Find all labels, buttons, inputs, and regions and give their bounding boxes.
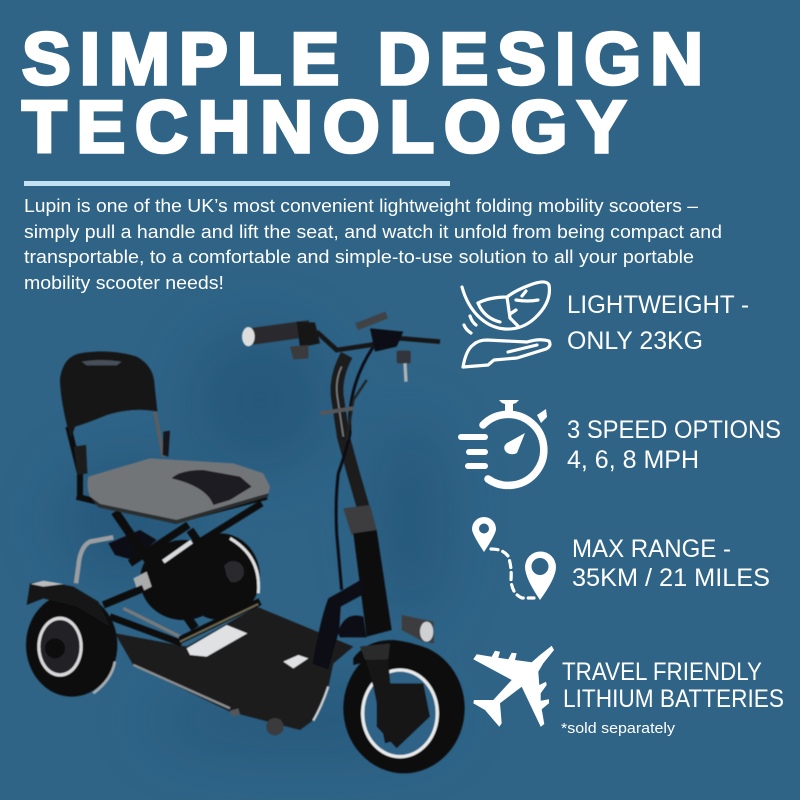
rear chrome bar xyxy=(76,537,113,583)
feature text: ONLY 23KG xyxy=(567,327,703,355)
intro text block: mobility scooter needs! xyxy=(24,273,224,293)
feature text: LIGHTWEIGHT - xyxy=(567,291,749,319)
deck xyxy=(115,607,353,735)
divider bar xyxy=(24,181,450,186)
intro text block: Lupin is one of the UK’s most convenient lightweight folding mobility scooters – xyxy=(24,196,698,216)
feature text: TRAVEL FRIENDLY xyxy=(562,658,762,686)
front wheel and fork xyxy=(343,640,465,773)
title: TECHNOLOGY xyxy=(22,87,626,168)
feature text xyxy=(572,535,770,592)
icon: feather over hand xyxy=(462,282,550,367)
intro text block: simply pull a handle and lift the seat, and watch it unfold from being compact and xyxy=(24,222,722,242)
handlebar xyxy=(242,315,440,382)
feature text xyxy=(567,291,749,355)
title xyxy=(22,19,703,168)
feature text xyxy=(567,416,781,474)
icon: stopwatch xyxy=(458,400,547,485)
feature text: 35KM / 21 MILES xyxy=(572,564,770,592)
title: SIMPLE DESIGN xyxy=(22,19,703,100)
white deck pads xyxy=(187,625,308,668)
motor and chassis xyxy=(108,530,227,620)
icon: airplane xyxy=(473,646,554,727)
intro text block xyxy=(24,196,722,293)
feature text: 4, 6, 8 MPH xyxy=(567,446,699,474)
footnote: *sold separately xyxy=(561,720,676,737)
feature: speed options xyxy=(458,400,781,485)
feature: max range xyxy=(472,517,770,600)
seat cushion xyxy=(87,458,270,524)
steering column xyxy=(313,347,392,669)
feature text: MAX RANGE - xyxy=(572,535,731,563)
seat back with handle xyxy=(60,351,170,498)
feature: travel friendly xyxy=(473,646,784,737)
scissor frame xyxy=(103,503,262,643)
icon: route pins xyxy=(472,517,556,600)
intro text block: transportable, to a comfortable and simple-to-use solution to all your portable xyxy=(24,247,694,267)
feature text: LITHIUM BATTERIES xyxy=(563,685,784,713)
far rear wheel xyxy=(180,533,260,620)
feature: lightweight xyxy=(462,282,749,367)
near rear wheel xyxy=(26,581,117,697)
feature text xyxy=(562,658,784,713)
seat frame xyxy=(77,497,267,521)
headlight xyxy=(402,615,434,643)
feature text: 3 SPEED OPTIONS xyxy=(567,416,781,444)
scooter illustration xyxy=(26,315,465,773)
